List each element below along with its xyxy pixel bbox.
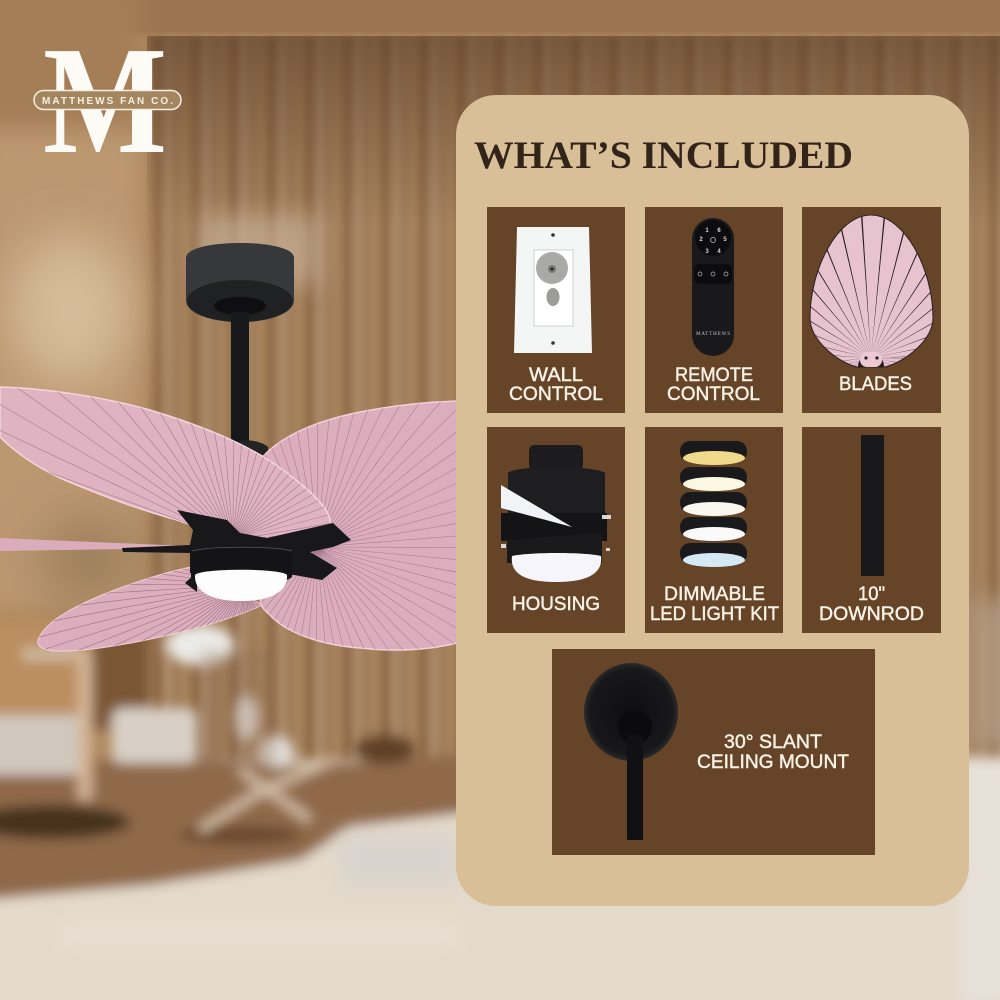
card: LED light kit: LED LIGHT KIT [650,603,779,625]
card: slant ceiling mount: CEILING MOUNT [697,751,849,773]
icon: remote: 1 [705,228,709,234]
icon: remote: 4 [717,249,721,255]
logo: Matthews Fan Co.: M [43,16,167,186]
thin rear blade [0,538,188,551]
card: downrod [802,427,941,633]
downrod [231,312,249,447]
upper left blade [0,386,331,538]
card: slant ceiling mount: 30° SLANT [724,731,822,753]
lower left blade [37,566,263,652]
icon: five LED colour discs [680,441,747,567]
card: wall control: WALL [529,364,583,386]
icon: remote [692,218,734,356]
icon: remote: 5 [723,237,727,243]
card: blades [802,207,941,413]
card: remote control: REMOTE [675,364,753,386]
collar [226,440,268,470]
right blade [217,401,457,650]
card: downrod: DOWNROD [819,603,924,625]
rug [0,755,470,900]
icon: remote: MATTHEWS [696,332,730,337]
logo: Matthews Fan Co.: MATTHEWS FAN CO. [42,96,173,107]
canopy [186,243,294,322]
icon: remote: 2 [699,237,703,243]
card: housing [487,427,625,633]
icon: blade [810,214,934,368]
card: remote control [645,207,783,413]
card: wall control: CONTROL [509,383,603,405]
card: remote control: CONTROL [667,383,760,405]
card: housing: HOUSING [512,593,600,615]
panel: what's included [456,95,969,906]
ceiling fan [0,243,457,705]
card: LED light kit: DIMMABLE [664,583,765,605]
icon: remote: 3 [705,249,709,255]
icon: wall control [514,227,592,353]
icon: housing [501,445,611,582]
icon: downrod [861,435,884,576]
card: wall control [487,207,625,413]
floor [0,760,1000,1000]
card: blades: BLADES [839,373,912,395]
LED dome light [195,570,287,601]
card: LED light kit [645,427,783,633]
card: slant ceiling mount [552,649,875,855]
icon: remote: 6 [717,228,721,234]
heading: WHAT’S INCLUDED [474,134,853,177]
card: downrod: 10" [858,583,885,605]
icon: ceiling mount [584,663,678,840]
motor housing and arms [122,510,351,592]
